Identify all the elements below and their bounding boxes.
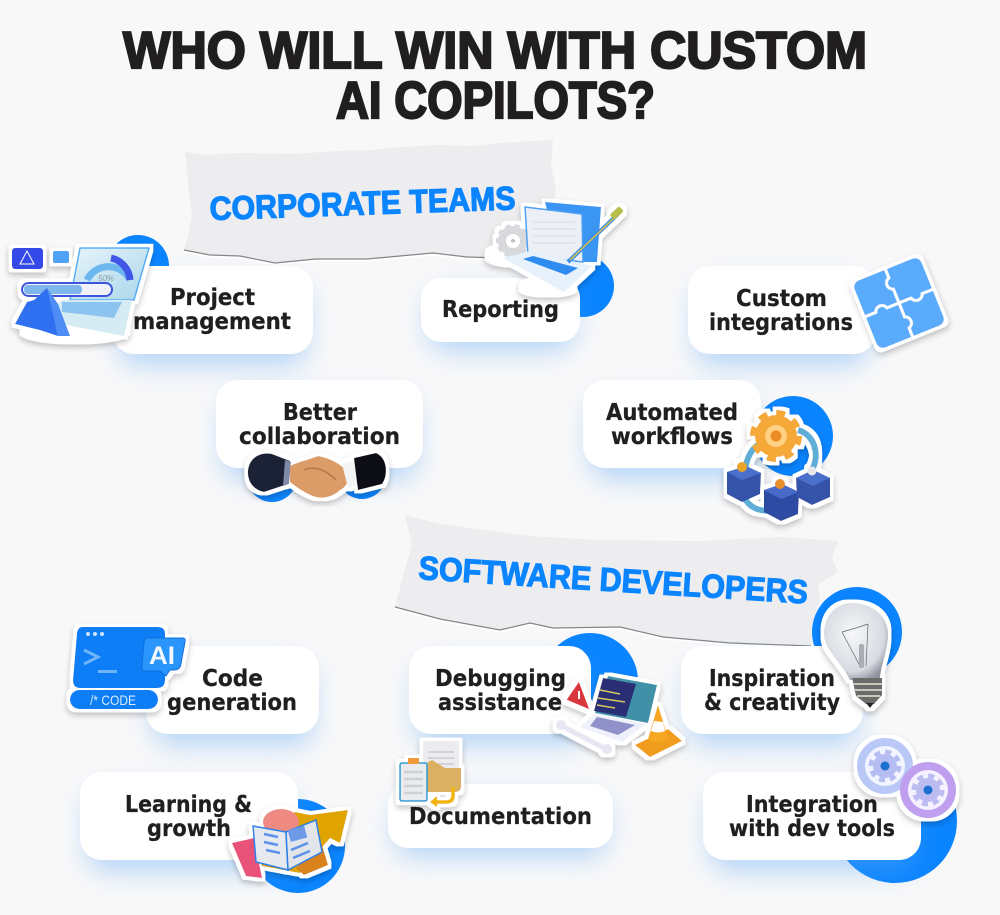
icon: project laptop: 50% — [98, 274, 114, 283]
icon: project laptop — [12, 248, 149, 341]
icon: debugging laptop, warning, wrench and cone — [556, 676, 682, 757]
card: code generation: generation — [167, 690, 297, 716]
icon: learning book, brain and arrow — [232, 809, 348, 878]
card: project management — [112, 266, 313, 354]
card: inspiration and creativity — [681, 646, 863, 734]
card shadows — [86, 282, 917, 872]
card: automated workflows — [583, 380, 761, 468]
icon: code AI window: /* CODE — [90, 692, 136, 708]
title — [123, 22, 867, 130]
card: inspiration and creativity: Inspiration — [709, 666, 835, 692]
icon: code AI window — [70, 627, 185, 709]
panel: software developers banner — [395, 515, 838, 647]
card: automated workflows: workflows — [611, 424, 733, 450]
card: reporting — [421, 278, 580, 342]
icon: workflow gear and cubes — [727, 413, 830, 521]
card: learning and growth — [80, 772, 298, 860]
card: custom integrations — [688, 266, 876, 354]
card: project management: management — [133, 309, 291, 335]
title: AI COPILOTS? — [336, 72, 655, 130]
card: debugging assistance — [409, 646, 591, 734]
card: custom integrations: integrations — [709, 310, 853, 336]
card: better collaboration — [216, 380, 423, 468]
card: integration with dev tools — [703, 772, 921, 860]
icon: documentation folder and clipboard — [400, 741, 461, 807]
panel: software developers banner: SOFTWARE DEVELOPERS — [418, 549, 809, 610]
icon: code AI window: AI — [149, 642, 175, 670]
card: learning and growth: Learning & — [125, 792, 252, 818]
card: code generation: Code — [202, 666, 263, 692]
panel: corporate teams banner: CORPORATE TEAMS — [209, 179, 516, 227]
card: integration with dev tools: Integration — [746, 792, 878, 818]
icon: puzzle pieces — [852, 256, 946, 350]
panel: corporate teams banner — [184, 140, 556, 264]
card: debugging assistance: assistance — [438, 690, 562, 716]
card: documentation — [388, 784, 613, 848]
card: debugging assistance: Debugging — [435, 666, 566, 692]
card: custom integrations: Custom — [736, 286, 827, 312]
card: automated workflows: Automated — [606, 400, 738, 426]
card: integration with dev tools: with dev tools — [729, 816, 895, 842]
title: WHO WILL WIN WITH CUSTOM — [123, 22, 867, 80]
card: code generation — [146, 646, 319, 734]
card: inspiration and creativity: & creativity — [704, 690, 840, 716]
card: better collaboration: collaboration — [239, 424, 400, 450]
card: documentation: Documentation — [409, 804, 592, 830]
icon: infinity gears — [861, 742, 952, 814]
card: reporting: Reporting — [442, 297, 559, 323]
icon: handshake — [248, 453, 386, 498]
card: project management: Project — [170, 285, 255, 311]
blue accent circles — [107, 235, 957, 893]
icon: reporting laptop — [488, 202, 624, 294]
card: better collaboration: Better — [283, 400, 358, 426]
card: learning and growth: growth — [147, 816, 231, 842]
icon: light bulb — [824, 603, 888, 708]
